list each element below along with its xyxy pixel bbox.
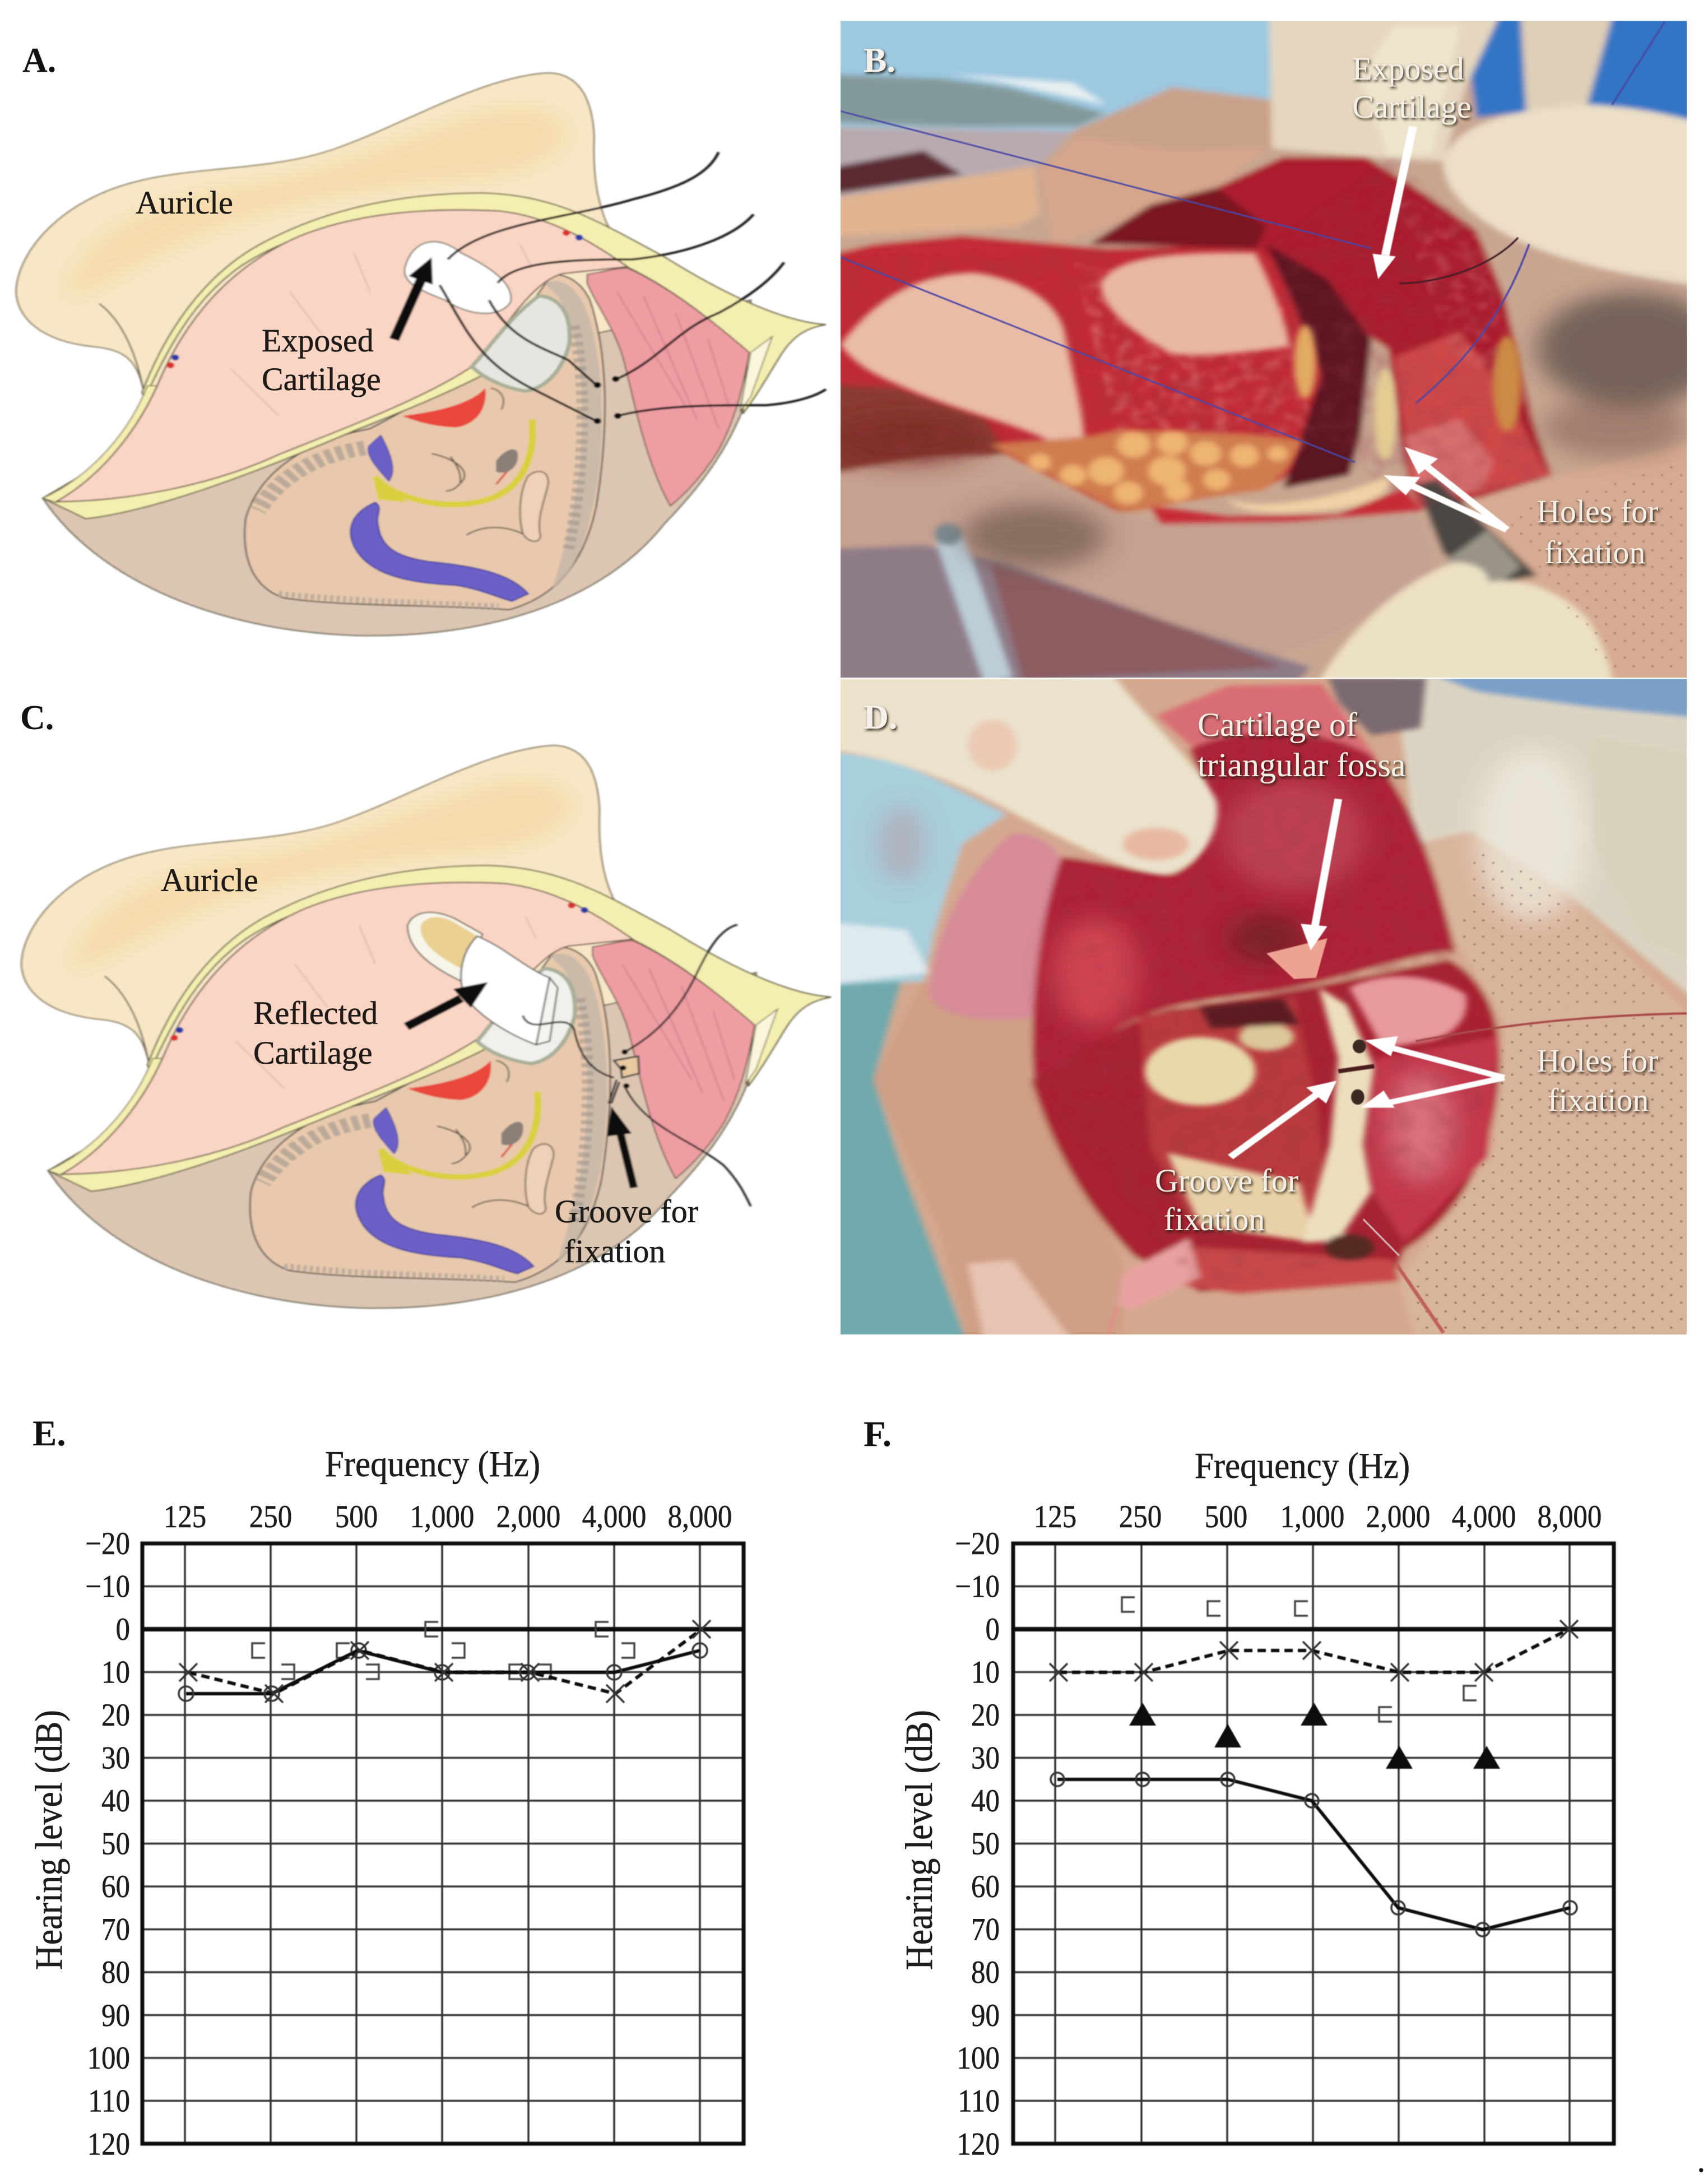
flap [1032, 732, 1455, 1078]
photo labels D [864, 698, 1658, 1237]
sutures [841, 22, 1665, 462]
upper pink [1156, 683, 1377, 758]
photo B [841, 21, 1687, 678]
photo labels B: B. [864, 41, 895, 80]
cavity lights, bone and glove above tissue [819, 673, 1466, 1260]
fixation tab [614, 1056, 639, 1078]
soft shading [879, 750, 1587, 1183]
label: Auricle: Auricle [136, 184, 233, 221]
label: Auricle: Auricle [161, 862, 258, 898]
frequency tick labels: 500 [1205, 1499, 1247, 1534]
chart grid [142, 1543, 744, 2144]
label: Reflected Cartilage: Cartilage [253, 1035, 373, 1071]
hearing level tick labels: 20 [101, 1697, 130, 1733]
reflected cartilage flap [407, 912, 482, 981]
frequency tick labels: 1,000 [1280, 1499, 1344, 1534]
suture threads [440, 152, 826, 421]
skin patches, fat and exposed fascia above tissue [841, 253, 1521, 523]
ear lobe [929, 833, 1062, 1019]
hearing level tick labels: 50 [101, 1826, 130, 1861]
dark flap [1089, 157, 1551, 510]
arrow: reflected cartilage [406, 998, 461, 1027]
hearing level tick labels: 80 [971, 1954, 1000, 1990]
frequency tick labels: 125 [164, 1499, 206, 1534]
panel B: surgical photo, exposed cartilage [841, 21, 1687, 678]
photo labels D: Cartilage of [1198, 706, 1357, 743]
right tissue [1366, 1037, 1499, 1243]
arrow: groove for fixation [620, 1132, 634, 1188]
detail marks [1109, 938, 1687, 1333]
trailing period: . [1697, 2141, 1706, 2179]
series: air conduction right (solid circles) [1051, 1773, 1577, 1936]
hearing level tick labels: 40 [971, 1783, 1000, 1818]
hearing level tick labels: 100 [957, 2040, 1000, 2076]
hearing level tick labels: 30 [101, 1740, 130, 1775]
hearing level tick labels: 90 [971, 1997, 1000, 2033]
hearing level tick labels: −20 [85, 1526, 130, 1561]
hearing level tick labels: 10 [971, 1654, 1000, 1690]
hearing level tick labels: 0 [986, 1611, 1000, 1647]
hearing level tick labels: −10 [85, 1569, 130, 1604]
photo labels B [864, 41, 1658, 571]
arrow: black to cartilage [394, 279, 421, 340]
hearing level tick labels: 20 [971, 1697, 1000, 1733]
panel D: surgical photo, holes and groove [819, 673, 1708, 1359]
series: air conduction left (dashed crosses) [179, 1620, 711, 1703]
photo labels B: fixation [1544, 534, 1645, 571]
hearing level tick labels: 110 [958, 2083, 1000, 2118]
photo labels D: triangular fossa [1198, 747, 1406, 783]
tube [948, 534, 998, 680]
hair pores [1410, 1016, 1687, 1333]
frequency tick labels: 4,000 [1452, 1499, 1516, 1534]
hearing level tick labels: 30 [971, 1740, 1000, 1775]
lower right skin [1421, 436, 1708, 698]
left skin [874, 981, 1128, 1359]
illustration A [16, 73, 826, 636]
bottom skin [819, 456, 1438, 659]
frequency tick labels: 250 [249, 1499, 292, 1534]
frequency tick labels: 8,000 [1538, 1499, 1602, 1534]
hearing level tick labels: −20 [955, 1526, 1000, 1561]
hearing level tick labels: 70 [971, 1912, 1000, 1947]
hearing level tick labels: 80 [101, 1954, 130, 1990]
label: Groove for fixation: Groove for [555, 1193, 698, 1230]
hearing level tick labels: 50 [971, 1826, 1000, 1861]
label: Exposed Cartilage: Exposed [262, 322, 374, 359]
white arrows [1231, 799, 1504, 1157]
frequency tick labels [164, 1499, 732, 1534]
frequency tick labels: 125 [1034, 1499, 1076, 1534]
hearing level tick labels: 90 [101, 1997, 130, 2033]
label: Groove for fixation: fixation [564, 1233, 665, 1269]
right skin [1399, 831, 1708, 1359]
hearing level tick labels: 40 [101, 1783, 130, 1818]
tissue mottling [841, 157, 1551, 510]
hearing level tick labels [85, 1526, 130, 2162]
photo labels D: Groove for [1155, 1162, 1298, 1199]
series: air conduction right (solid circles) [179, 1643, 707, 1701]
white arrows [1372, 127, 1507, 530]
bottom glove [1311, 563, 1615, 698]
exposed cartilage [405, 242, 511, 313]
photo labels B: Cartilage [1352, 89, 1472, 125]
photo labels D: fixation [1164, 1201, 1265, 1237]
panel A: ear flap illustration with exposed cartilage [16, 41, 826, 636]
panel letter E: E. [33, 1413, 66, 1454]
forceps [1415, 480, 1538, 585]
photo D [819, 673, 1708, 1359]
panel C: ear flap illustration with reflected cartilage [20, 699, 831, 1308]
photo labels B: Exposed [1352, 50, 1464, 87]
hearing level tick labels: −10 [955, 1569, 1000, 1604]
hearing level tick labels: 60 [971, 1869, 1000, 1904]
hearing level tick labels [955, 1526, 1000, 2162]
left red band [819, 235, 1328, 510]
scalp [1477, 279, 1708, 654]
hearing level tick labels: 70 [101, 1912, 130, 1947]
axis title: Hearing level: Hearing level (dB) [898, 1710, 940, 1970]
panel E: audiogram, normal hearing [27, 1413, 744, 2162]
frequency tick labels: 2,000 [1366, 1499, 1430, 1534]
frequency tick labels: 250 [1119, 1499, 1162, 1534]
panel letter F: F. [864, 1414, 892, 1454]
frequency tick labels: 1,000 [410, 1499, 474, 1534]
hearing level tick labels: 10 [101, 1654, 130, 1690]
axis title: Hearing level: Hearing level (dB) [27, 1710, 70, 1970]
tissue mottling [1032, 732, 1499, 1292]
hearing level tick labels: 60 [101, 1869, 130, 1904]
series: air conduction left (dashed crosses) [1050, 1620, 1578, 1681]
cavity [1032, 960, 1500, 1292]
axis title: Frequency: Frequency (Hz) [1195, 1445, 1410, 1486]
frequency tick labels: 8,000 [668, 1499, 732, 1534]
bone conduction brackets [252, 1622, 634, 1679]
bottom rim [1183, 1247, 1399, 1294]
hearing level tick labels: 0 [116, 1611, 130, 1647]
scalp hair and lower hair, soft [829, 292, 1708, 569]
hearing level tick labels: 100 [87, 2040, 130, 2076]
masked bone conduction triangles [1129, 1703, 1500, 1769]
skin pores [1504, 458, 1687, 671]
suture threads [523, 925, 751, 1206]
frequency tick labels: 2,000 [496, 1499, 560, 1534]
vessels [167, 362, 174, 368]
label: Exposed Cartilage: Cartilage [262, 361, 381, 397]
chart grid [1013, 1543, 1614, 2144]
hearing level tick labels: 110 [88, 2083, 130, 2118]
grey bulge behind [477, 968, 575, 1064]
label: Reflected Cartilage: Reflected [253, 995, 378, 1031]
frequency tick labels: 500 [335, 1499, 378, 1534]
bone conduction brackets [1122, 1597, 1477, 1722]
frequency tick labels [1034, 1499, 1602, 1534]
axis title: Frequency: Frequency (Hz) [325, 1443, 540, 1485]
hearing level tick labels: 120 [957, 2126, 1000, 2162]
frequency tick labels: 4,000 [582, 1499, 646, 1534]
photo labels D: Holes for [1537, 1042, 1658, 1079]
panel letter A: A. [22, 41, 56, 80]
vessels [170, 1035, 178, 1041]
photo labels D: fixation [1548, 1082, 1649, 1118]
panel letter C: C. [20, 699, 54, 737]
illustration C [21, 745, 831, 1308]
hearing level tick labels: 120 [87, 2126, 130, 2162]
photo labels D: D. [864, 698, 897, 736]
plastic and drapes [1394, 673, 1708, 1016]
grey cartilage bulge [472, 296, 570, 391]
panel F: audiogram, hearing loss [864, 1414, 1706, 2179]
drape [819, 545, 1311, 698]
photo labels B: Holes for [1537, 493, 1658, 530]
glove right [1444, 105, 1708, 288]
